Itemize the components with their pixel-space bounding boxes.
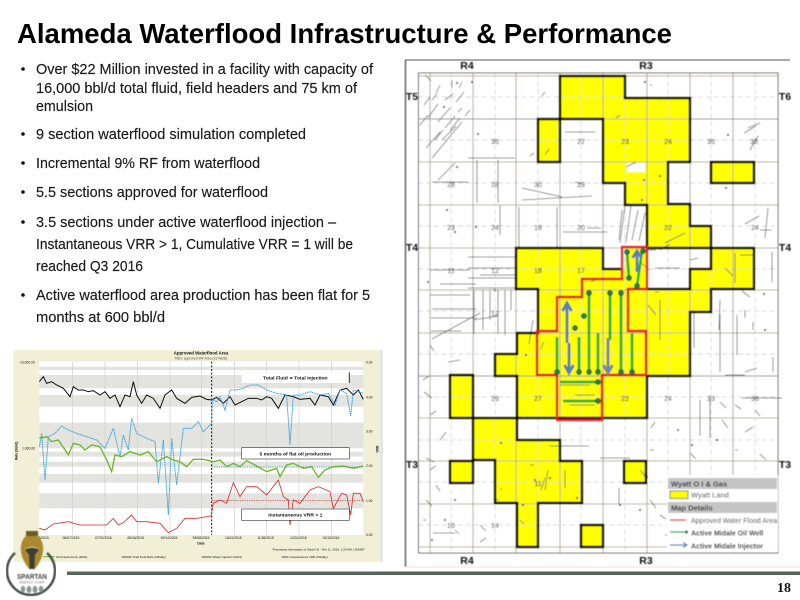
bullet: investment: [21, 61, 374, 115]
legend: Wyatt Land: [691, 490, 729, 500]
section numbers: 35: [491, 139, 499, 146]
bullet: approved sections: 5.5 sections approved for waterflood: [36, 184, 268, 201]
bullet: flat production: months at 600 bbl/d: [36, 309, 165, 326]
section numbers: 36: [750, 139, 758, 146]
chart axes labels: 06/07/2015: [63, 536, 79, 540]
chart axes labels: Proprietary information of Wyatt Oil - Feb 11, 2016, 1:20 AM, US/MDT: [273, 547, 365, 551]
section numbers: 12: [491, 268, 499, 275]
page number: 18: [777, 581, 791, 596]
bullet: active injection: Instantaneous VRR > 1, Cumulative VRR = 1 will be: [36, 236, 353, 253]
callout: VRR: [242, 509, 349, 520]
section numbers: 28: [447, 182, 455, 189]
chart line: total fluid: [39, 377, 363, 408]
legend: Active Midale Oil Well: [691, 530, 763, 538]
map range and township labels: [406, 60, 791, 567]
section numbers: 11: [534, 481, 542, 488]
section numbers: 18: [534, 268, 542, 275]
chart axes labels: 09/08/2015: [193, 536, 209, 540]
bullet: simulation: 9 section waterflood simulation completed: [36, 126, 306, 143]
bullet: investment: 16,000 bbl/d total fluid, field headers and 75 km of: [36, 80, 358, 97]
chart axes labels: Date: [197, 541, 205, 545]
Wyatt land: yellow acreage: [450, 76, 754, 547]
chart line: oil production: [39, 437, 363, 477]
chart axes labels: 1.00: [366, 499, 373, 503]
chart line: instantaneous VRR: [39, 480, 363, 533]
chart legend: Oil Actual Hourly (bbl/d): [56, 555, 87, 559]
callout: flat oil: 5 months of flat oil production: [259, 451, 331, 457]
section numbers: 24: [491, 225, 499, 232]
section numbers: 19: [534, 225, 542, 232]
legend: [667, 475, 778, 552]
chart axes labels: 2.00: [366, 464, 373, 468]
chart axes labels: 5.00: [366, 361, 373, 365]
chart title: Approved Waterflood Area: [174, 350, 229, 355]
callout: flat oil: [242, 448, 349, 459]
section numbers: 24: [751, 225, 759, 232]
chart legend: Instantaneous VRR (bbl/day): [289, 555, 328, 559]
chart title: [174, 350, 229, 361]
active injectors: [562, 251, 642, 373]
section numbers: 12: [491, 311, 499, 318]
map range and township labels: T5: [406, 91, 418, 103]
chart axes labels: 0.00: [366, 533, 373, 537]
section numbers: 24: [664, 139, 672, 146]
section numbers: 35: [707, 139, 715, 146]
chart axes labels: 12/01/2015: [290, 536, 307, 540]
bullet: active injection: [21, 214, 353, 275]
scattered wells: [420, 75, 782, 542]
chart axes labels: 1,000.00: [22, 446, 35, 450]
section numbers: 22: [664, 225, 672, 232]
map range and township labels: R4: [460, 60, 474, 72]
title: Alameda Waterflood Infrastructure & Performance: [17, 18, 672, 49]
chart axes labels: 0.00: [27, 533, 33, 537]
map range and township labels: R4: [460, 555, 474, 567]
chart legend: [43, 555, 328, 559]
section numbers: 36: [751, 396, 759, 403]
map range and township labels: T3: [779, 459, 791, 471]
map range and township labels: T4: [779, 242, 791, 254]
section numbers: 28: [491, 182, 499, 189]
callout: total fluid: [242, 372, 349, 383]
section numbers: 17: [577, 268, 585, 275]
bullet: incremental RF: Incremental 9% RF from waterflood: [36, 155, 260, 172]
bullet: investment: Over $22 Million invested in a facility with capacity of: [36, 61, 374, 78]
panel: map: [405, 60, 800, 567]
section numbers: [447, 139, 759, 530]
chart axes labels: VRR: [376, 445, 380, 453]
bullet: active injection: 3.5 sections under active waterflood injection –: [36, 214, 337, 231]
bullet: flat production: Active waterflood area production has been flat for 5: [36, 287, 370, 304]
approved waterflood area outline: [537, 247, 647, 420]
section numbers: 23: [447, 225, 455, 232]
map range and township labels: T6: [779, 91, 791, 103]
section numbers: 29: [577, 182, 585, 189]
active oil wells: [555, 249, 645, 403]
section numbers: 33: [707, 396, 715, 403]
section numbers: 14: [491, 523, 499, 530]
chart axes labels: 07/22/2015: [95, 536, 112, 540]
section numbers: 22: [577, 139, 585, 146]
section numbers: 10: [447, 523, 455, 530]
chart axes labels: 09/14/2015: [161, 536, 177, 540]
map range and township labels: R3: [639, 60, 653, 72]
legend: Map Details: [671, 504, 713, 512]
chart axes labels: 10,000.00: [20, 361, 35, 365]
chart axes labels: 11/05/2015: [257, 536, 274, 540]
map range and township labels: T3: [406, 459, 418, 471]
logo: Spartan: [7, 531, 55, 595]
section numbers: 23: [621, 139, 629, 146]
logo: Spartan: ENERGY CORP: [19, 580, 46, 584]
panel: production chart: [13, 350, 383, 562]
chart axes labels: 03/2015: [37, 536, 49, 540]
chart axes labels: 01/15/2016: [323, 536, 339, 540]
section numbers: 30: [534, 182, 542, 189]
logo: Spartan: SPARTAN: [17, 572, 47, 581]
section numbers: 24: [664, 396, 672, 403]
section numbers: 22: [621, 396, 629, 403]
chart axes labels: 3.00: [366, 430, 373, 434]
chart axes labels: [14, 361, 380, 551]
map range and township labels: T4: [406, 242, 418, 254]
chart axes labels: 06/16/2015: [127, 536, 144, 540]
chart axes labels: 4.00: [366, 395, 373, 399]
chart legend: Water Injection (bbl/d): [213, 555, 242, 559]
section numbers: 26: [491, 396, 499, 403]
chart axes labels: Rate (bbl/d): [14, 442, 18, 460]
bullet: investment: emulsion: [36, 98, 93, 115]
legend: Approved Water Flood Area: [691, 518, 777, 525]
bullet list: [21, 61, 374, 326]
callout: VRR: Instantaneous VRR > 1: [268, 513, 323, 519]
section numbers: 11: [447, 268, 455, 275]
legend: Active Midale Injector: [691, 544, 763, 550]
chart title: Filter: approved WF Area (23 Wells): [175, 357, 227, 361]
chart line: water injection: [39, 385, 363, 515]
callout: total fluid: Total Fluid ∝ Total Injection: [263, 376, 328, 382]
map range and township labels: R3: [639, 555, 653, 567]
chart legend: Total Fluid Rate (bbl/day): [133, 555, 166, 559]
legend: Wyatt O I & Gas: [671, 480, 727, 488]
bullet: flat production: [21, 287, 370, 326]
chart axes labels: 10/01/2015: [225, 536, 242, 540]
section numbers: 27: [534, 396, 542, 403]
outlines: Wyatt land: [450, 76, 754, 547]
bullet: active injection: reached Q3 2016: [36, 258, 143, 275]
section numbers: 20: [577, 225, 585, 232]
footer rule: [67, 572, 800, 575]
